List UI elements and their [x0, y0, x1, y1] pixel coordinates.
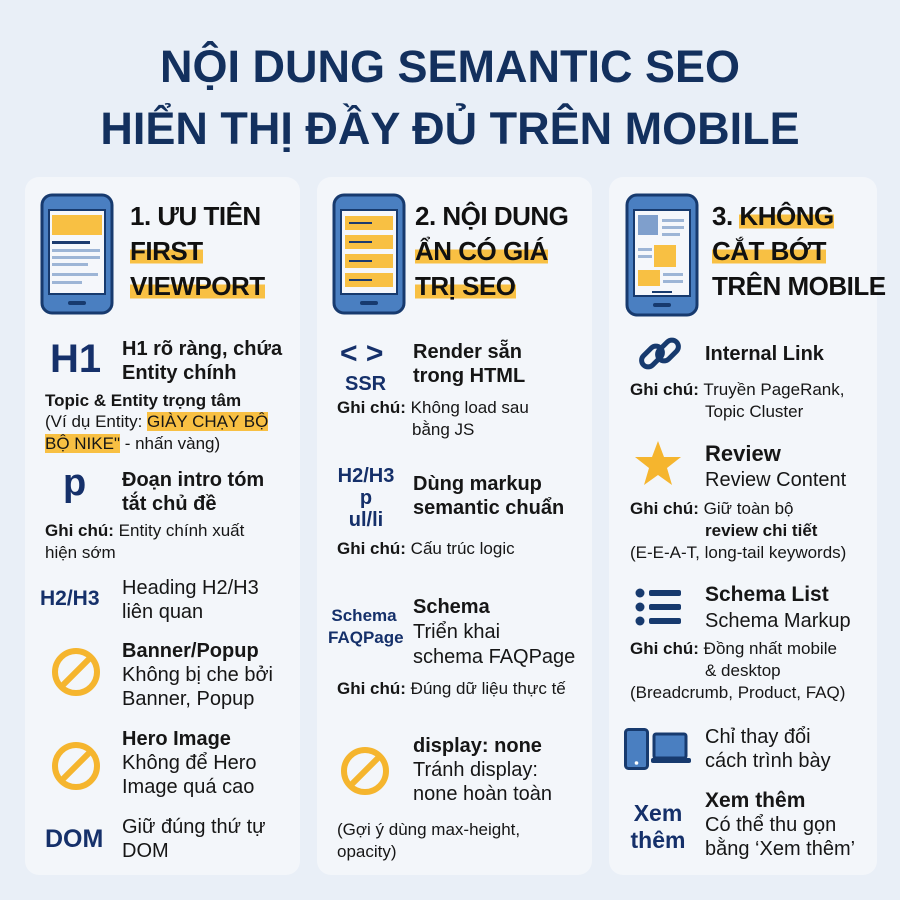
item: hero image — [52, 728, 257, 798]
heading 3: 3. KHÔNG — [712, 201, 834, 231]
icon: phone 2 — [332, 194, 406, 314]
heading 2: 2. NỘI DUNG — [415, 201, 568, 231]
item: markup: Dùng markup — [413, 473, 542, 495]
item: banner popup: Không bị che bởi — [122, 664, 273, 686]
item: schema faq: Ghi chú: Đúng dữ liệu thực tế — [337, 679, 566, 698]
item: review: (E-E-A-T, long-tail keywords) — [630, 543, 846, 562]
item: H2/H3: H2/H3 — [40, 587, 100, 610]
heading 3 — [712, 201, 886, 301]
item: display none: none hoàn toàn — [413, 783, 552, 805]
item: schema list: Schema Markup — [705, 610, 851, 632]
item: schema faq — [328, 596, 575, 698]
item: display none: display: none — [413, 735, 542, 757]
item: xem them: thêm — [631, 827, 685, 853]
item: markup: semantic chuẩn — [413, 497, 564, 519]
item: H1 — [45, 337, 282, 453]
icon: phone 3 — [626, 194, 698, 316]
item: hero image: Image quá cao — [122, 776, 254, 798]
item: xem them: bằng ‘Xem thêm’ — [705, 838, 855, 860]
heading 3: TRÊN MOBILE — [712, 271, 886, 301]
item: xem them: Có thể thu gọn — [705, 814, 836, 836]
panel: 1 uu tien first viewport — [25, 177, 300, 875]
item: internal link: Internal Link — [705, 343, 824, 365]
item: display none: Tránh display: — [413, 759, 538, 781]
item: SSR: Ghi chú: Không load sau — [337, 398, 529, 417]
item: markup: ul/li — [349, 509, 383, 531]
item: H1: Topic & Entity trọng tâm — [45, 391, 241, 410]
item: devices — [624, 726, 831, 772]
item: H2/H3: liên quan — [122, 601, 203, 623]
item: DOM: DOM — [45, 825, 103, 853]
item: H2/H3: Heading H2/H3 — [122, 577, 259, 599]
heading 1 — [130, 201, 265, 301]
item: schema faq: Triển khai — [413, 621, 500, 643]
item: review: review chi tiết — [705, 521, 817, 540]
item: schema list: Schema List — [705, 583, 829, 606]
item: devices: cách trình bày — [705, 750, 831, 772]
item: review: Ghi chú: Giữ toàn bộ — [630, 499, 794, 518]
item: H1: H1 — [50, 337, 101, 381]
item: hero image: Hero Image — [122, 728, 231, 750]
item: display none — [337, 735, 552, 861]
icon: phone 1 — [40, 194, 114, 314]
heading 3: CẮT BỚT — [712, 236, 826, 266]
heading 1: FIRST — [130, 236, 203, 266]
item: devices: Chỉ thay đổi — [705, 726, 811, 748]
item: SSR: < > — [340, 337, 383, 370]
item: banner popup — [52, 640, 273, 710]
item: markup: p — [360, 487, 372, 509]
item: p intro — [45, 462, 264, 562]
item: p intro: Ghi chú: Entity chính xuất — [45, 521, 244, 540]
item: p intro: hiện sớm — [45, 543, 116, 562]
heading 2 — [415, 201, 568, 301]
item: markup: H2/H3 — [338, 465, 394, 487]
item: SSR — [337, 337, 529, 439]
item: markup: Ghi chú: Cấu trúc logic — [337, 539, 515, 558]
item: SSR: trong HTML — [413, 365, 525, 387]
title: NỘI DUNG SEMANTIC SEO — [160, 41, 740, 92]
item: markup — [337, 465, 564, 558]
item: SSR: bằng JS — [412, 420, 474, 439]
item: p intro: p — [63, 462, 86, 504]
item: xem them — [630, 789, 855, 860]
item: review: Review Content — [705, 469, 846, 491]
heading 1: 1. ƯU TIÊN — [130, 201, 261, 231]
item: schema faq: Schema — [413, 596, 490, 618]
item: schema faq: FAQPage — [328, 628, 404, 647]
title — [100, 41, 800, 154]
item: schema list: (Breadcrumb, Product, FAQ) — [630, 683, 845, 702]
heading 2: ẨN CÓ GIÁ — [415, 236, 548, 266]
heading 1: VIEWPORT — [130, 271, 265, 301]
item: H2/H3 — [40, 577, 259, 623]
item: xem them: Xem — [634, 800, 682, 826]
item: SSR: Render sẵn — [413, 341, 522, 363]
item: H1: H1 rõ ràng, chứa — [122, 338, 282, 360]
title: HIỂN THỊ ĐẦY ĐỦ TRÊN MOBILE — [100, 103, 800, 154]
item: H1: BỘ NIKE" - nhấn vàng) — [45, 434, 220, 453]
item: xem them: Xem thêm — [705, 789, 805, 812]
item: schema faq: schema FAQPage — [413, 646, 575, 668]
panel: 3 khong cat bot — [609, 177, 877, 875]
item: DOM: DOM — [122, 840, 169, 862]
item: p intro: Đoạn intro tóm — [122, 469, 264, 491]
item: review: Review — [705, 441, 781, 466]
item: schema list: Ghi chú: Đồng nhất mobile — [630, 639, 837, 658]
item: DOM: Giữ đúng thứ tự — [122, 816, 266, 838]
item: H1: Entity chính — [122, 362, 236, 384]
item: p intro: tắt chủ đề — [122, 493, 216, 515]
item: schema list: & desktop — [705, 661, 781, 680]
item: banner popup: Banner, Popup — [122, 688, 254, 710]
item: display none: (Gợi ý dùng max-height, — [337, 820, 520, 839]
item: H1: (Ví dụ Entity: GIÀY CHẠY BỘ — [45, 412, 268, 431]
item: internal link: Ghi chú: Truyền PageRank, — [630, 380, 844, 399]
item: schema list — [630, 583, 851, 702]
item: review — [630, 441, 846, 562]
item: DOM — [45, 816, 266, 862]
heading 2: TRỊ SEO — [415, 271, 516, 301]
item: schema faq: Schema — [331, 606, 397, 625]
item: display none: opacity) — [337, 842, 397, 861]
item: internal link — [630, 338, 844, 421]
panel: 2 noi dung an — [317, 177, 592, 875]
item: internal link: Topic Cluster — [705, 402, 803, 421]
item: hero image: Không để Hero — [122, 752, 257, 774]
item: SSR: SSR — [345, 373, 386, 395]
item: banner popup: Banner/Popup — [122, 640, 259, 662]
